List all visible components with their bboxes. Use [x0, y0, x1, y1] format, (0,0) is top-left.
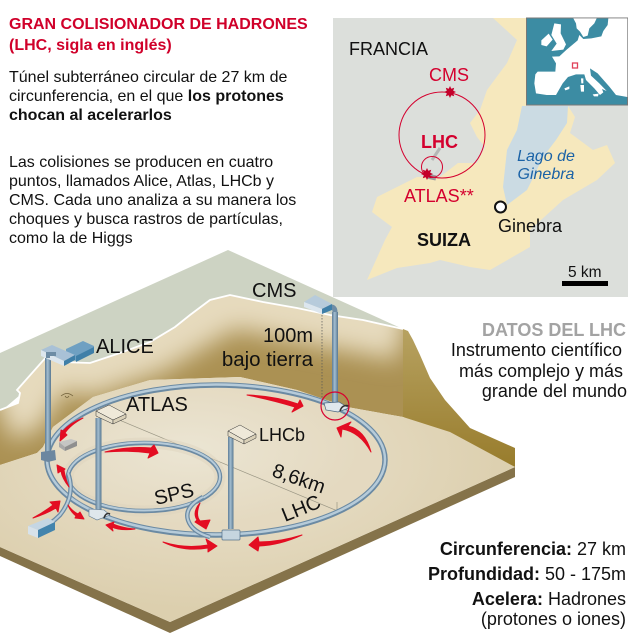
text block: datos del LHC: DATOS DEL LHC	[482, 320, 626, 340]
map labels: ATLAS**	[404, 186, 474, 206]
title	[9, 16, 308, 54]
locator square	[572, 63, 578, 68]
labels: 3D scene	[96, 280, 328, 527]
hillside surface	[0, 250, 403, 412]
map labels	[349, 39, 575, 250]
text block: key figures: Acelera: Hadrones	[472, 589, 626, 609]
Switzerland territory	[367, 18, 615, 280]
labels: 3D scene: CMS	[252, 280, 296, 302]
labels: 3D scene: LHC	[279, 491, 324, 527]
panel: locator map	[333, 18, 628, 297]
labels: 3D scene: SPS	[152, 479, 196, 510]
LHC ring on map	[399, 92, 485, 178]
floor	[0, 377, 515, 622]
text block: collisions: puntos, llamados Alice, Atlas, LHCb y	[9, 173, 274, 190]
text block: intro: Túnel subterráneo circular de 27 km de	[9, 69, 287, 86]
dotted depth line	[321, 312, 323, 402]
scale bar: 5 km	[568, 264, 602, 281]
map labels: SUIZA	[417, 230, 471, 250]
text block: intro: chocan al acelerarlos	[9, 107, 172, 124]
labels: 3D scene: ALICE	[96, 336, 154, 358]
labels: 3D scene: 8,6km	[269, 460, 328, 498]
SPS ring tunnel	[68, 442, 220, 511]
star: ATLAS	[421, 168, 433, 180]
map labels: Lago de	[517, 148, 575, 165]
detector: LHCb	[222, 425, 256, 540]
Ireland	[541, 34, 553, 46]
map labels: Ginebra	[498, 216, 563, 236]
text block: datos del LHC	[451, 320, 627, 401]
text block: intro: circunferencia, en el que los protones	[9, 88, 284, 105]
star: CMS	[444, 86, 456, 98]
islands	[581, 78, 583, 83]
labels: 3D scene: LHCb	[259, 425, 305, 445]
arrows: proton directions	[33, 395, 371, 552]
ring interior	[47, 385, 385, 535]
detector: ALICE	[41, 341, 94, 462]
Scandinavia	[573, 18, 597, 37]
map labels: FRANCIA	[349, 39, 428, 59]
text block: datos del LHC: Instrumento científico	[451, 340, 622, 360]
source box	[28, 518, 55, 538]
text block: datos del LHC: grande del mundo	[482, 381, 627, 401]
text block: key figures: (protones o iones)	[481, 609, 626, 629]
text block: collisions	[9, 154, 296, 247]
small eye mark	[61, 394, 73, 398]
LHC ring tunnel	[47, 384, 385, 535]
text block: key figures: Circunferencia: 27 km	[440, 539, 626, 559]
map labels: CMS	[429, 65, 469, 85]
grey block	[59, 439, 77, 451]
text block: collisions: choques y busca rastros de partículas,	[9, 211, 283, 228]
labels: 3D scene: 100m	[263, 325, 313, 347]
cliff side	[403, 329, 515, 467]
text block: key figures: Profundidad: 50 - 175m	[428, 564, 626, 584]
text block: key figures	[428, 539, 626, 629]
detector: CMS	[304, 295, 349, 420]
transfer tunnels	[40, 473, 210, 537]
text block: collisions: como la de Higgs	[9, 230, 133, 247]
text block: datos del LHC: más complejo y más	[459, 361, 623, 381]
text block: collisions: Las colisiones se producen en cuatro	[9, 154, 273, 171]
CMS highlight ring	[321, 392, 349, 420]
marker: Ginebra	[495, 202, 506, 212]
title: (LHC, sigla en inglés)	[9, 37, 172, 54]
title: GRAN COLISIONADOR DE HADRONES	[9, 16, 308, 33]
map labels: LHC	[421, 132, 458, 152]
text block: collisions: CMS. Cada uno analiza a su manera los	[9, 192, 296, 209]
inset: Europe	[526, 18, 628, 105]
scale bar	[562, 264, 608, 286]
mainland	[534, 18, 627, 97]
Lake Geneva	[503, 106, 568, 205]
map labels: Ginebra	[518, 166, 575, 183]
labels: 3D scene: bajo tierra	[222, 348, 314, 371]
measure line	[100, 412, 340, 512]
text block: intro	[9, 69, 287, 124]
panel: 3D cutaway of the LHC	[0, 250, 515, 633]
detector: ATLAS	[89, 405, 126, 520]
underground wall	[0, 295, 403, 465]
Great Britain	[551, 23, 566, 51]
floor edge	[0, 467, 515, 633]
labels: 3D scene: ATLAS	[126, 394, 188, 416]
